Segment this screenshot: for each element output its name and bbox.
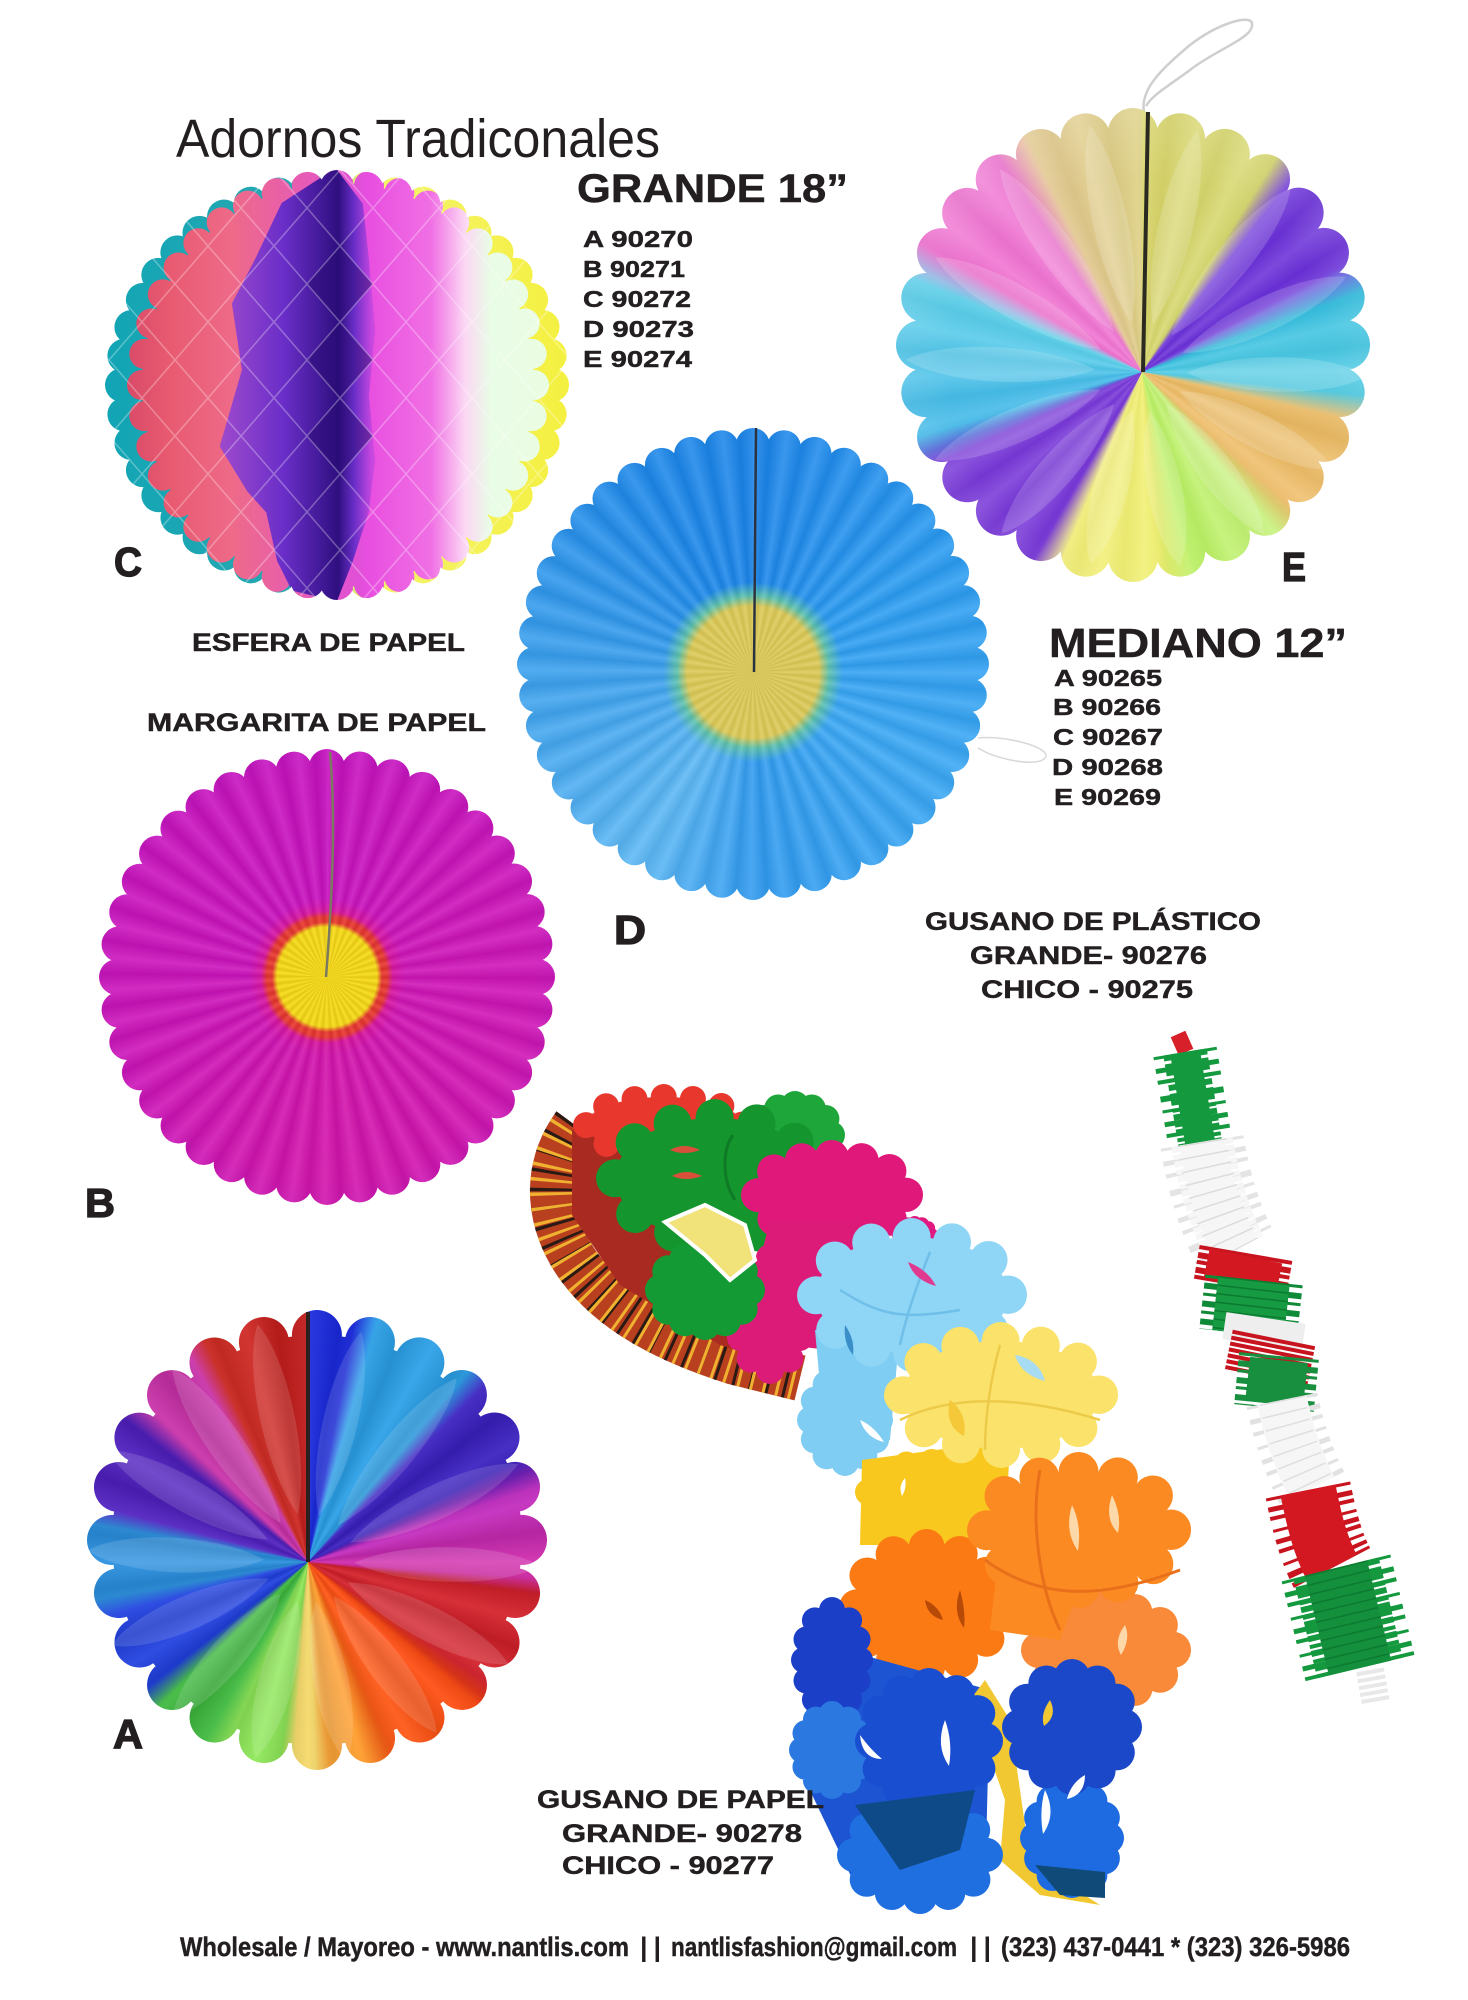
garland: dark underlay — [572, 1105, 800, 1370]
heading: grande size: GRANDE 18” — [577, 167, 848, 211]
decoration B: magenta paper daisy — [99, 749, 555, 1205]
garland: blue flower — [802, 1610, 1124, 1898]
decoration C: paper honeycomb ball — [105, 170, 569, 600]
label: A: A — [113, 1711, 143, 1757]
title: Adornos Tradiconales — [176, 109, 660, 169]
garland: white hole — [987, 1674, 1019, 1706]
decoration: paper garland — [553, 1097, 1180, 1905]
garland: red flower — [586, 1097, 742, 1153]
garland: pink flower — [738, 1157, 931, 1370]
garland: green flower — [615, 1105, 831, 1238]
label: E: E — [1282, 544, 1306, 590]
caption: plastic garland codes: CHICO - 90275 — [981, 976, 1193, 1004]
garland: light blue flower — [811, 1237, 1008, 1462]
list: grande codes — [583, 226, 694, 372]
caption: margarita: MARGARITA DE PAPEL — [147, 709, 486, 737]
footer: contact line — [180, 1932, 1350, 1962]
garland: striped edge stack — [553, 1125, 800, 1378]
garland: blue underlay — [805, 1640, 990, 1895]
footer: contact line: || — [970, 1932, 997, 1962]
list: mediano codes — [1052, 665, 1163, 810]
garland: yellow flower — [860, 1341, 1100, 1545]
caption: esfera: ESFERA DE PAPEL — [192, 629, 465, 657]
footer: contact line: || — [640, 1932, 667, 1962]
caption: paper garland codes: CHICO - 90277 — [562, 1852, 774, 1880]
garland: yellow strips — [970, 1680, 1100, 1905]
list: grande codes: C 90272 — [583, 286, 691, 312]
list: mediano codes: C 90267 — [1053, 724, 1163, 750]
footer: contact line: Wholesale / Mayoreo - www.nantlis.com — [180, 1932, 629, 1962]
caption: paper garland codes — [537, 1786, 824, 1880]
caption: plastic garland codes: GUSANO DE PLÁSTICO — [925, 907, 1261, 936]
garland: orange flower — [857, 1470, 1180, 1692]
list: grande codes: E 90274 — [583, 346, 692, 372]
decoration D: blue paper daisy — [517, 428, 1047, 900]
list: grande codes: B 90271 — [583, 256, 685, 282]
footer: contact line: nantlisfashion@gmail.com — [671, 1932, 957, 1962]
list: grande codes: A 90270 — [583, 226, 693, 252]
list: mediano codes: B 90266 — [1053, 694, 1161, 720]
caption: paper garland codes: GRANDE- 90278 — [562, 1820, 802, 1848]
heading: mediano size: MEDIANO 12” — [1049, 620, 1347, 666]
caption: plastic garland codes — [925, 907, 1261, 1004]
label: C: C — [114, 539, 142, 585]
garland: yellow center — [665, 1205, 755, 1280]
caption: plastic garland codes: GRANDE- 90276 — [970, 942, 1207, 970]
decoration A: rainbow paper fan — [87, 1310, 547, 1770]
list: grande codes: D 90273 — [583, 316, 694, 342]
label: D: D — [614, 907, 646, 953]
caption: paper garland codes: GUSANO DE PAPEL — [537, 1786, 824, 1814]
decoration E: pastel paper fan — [880, 20, 1390, 600]
decoration: plastic tricolor garland — [1178, 1034, 1376, 1704]
footer: contact line: (323) 437-0441 * (323) 326-5986 — [1001, 1932, 1350, 1962]
garland: green lower lobe — [661, 1256, 749, 1324]
list: mediano codes: A 90265 — [1054, 665, 1162, 691]
list: mediano codes: D 90268 — [1052, 754, 1163, 780]
list: mediano codes: E 90269 — [1054, 784, 1161, 810]
label: B: B — [85, 1180, 115, 1226]
